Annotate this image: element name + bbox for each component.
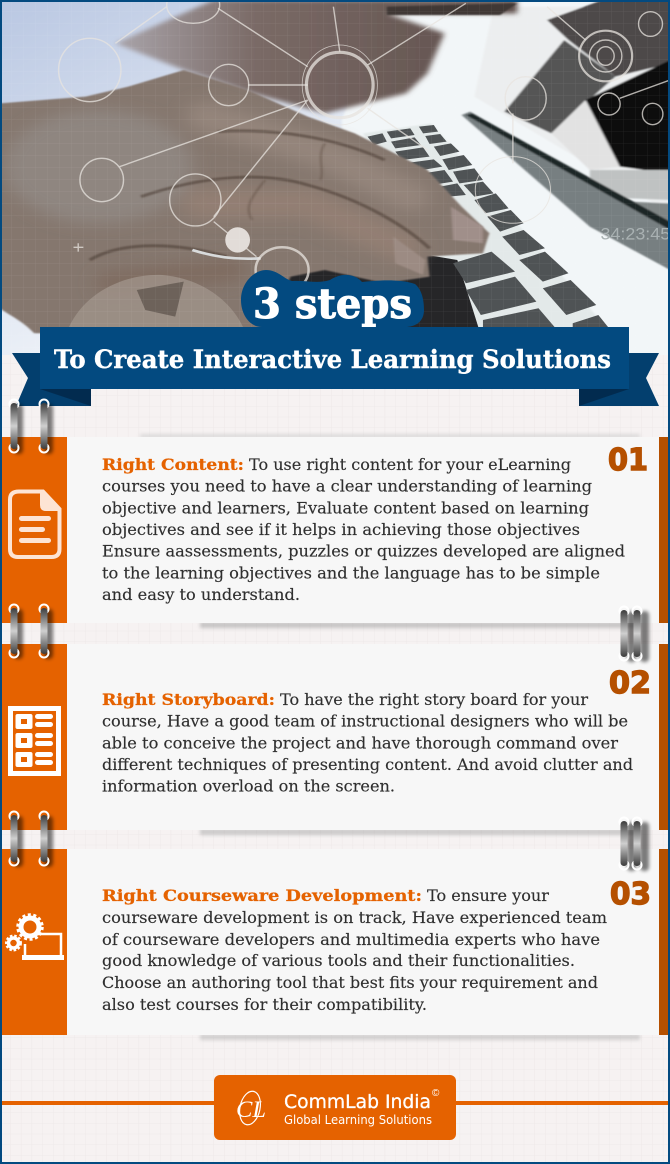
- icon: gears and laptop: [6, 915, 64, 960]
- text block: right storyboard: Right Storyboard:: [102, 690, 275, 709]
- ribbon tail right: [579, 353, 659, 406]
- dark keys below the fingers: [288, 256, 478, 327]
- text block: right content: courses you need to have a clear understanding of learning: [102, 478, 592, 496]
- steps heading: 3 steps: [253, 280, 412, 328]
- text block: right courseware development: courseware development is on track, Have experienced team: [102, 909, 607, 927]
- text block: right content: to the learning objectives and the language has to be simple: [102, 564, 600, 582]
- panel: step 3 right courseware development: [2, 849, 668, 1040]
- copyright mark: ©: [432, 1088, 440, 1099]
- text block: right content: objectives and see if it helps in achieving those objectives: [102, 521, 580, 539]
- ribbon folds: [40, 389, 91, 406]
- text block: right content: objective and learners, Evaluate content based on learning: [102, 499, 589, 517]
- text block: right content: Right Content:: [102, 455, 244, 474]
- text block: right courseware development: [102, 886, 607, 1014]
- logo mark: [236, 1089, 266, 1127]
- text block: right courseware development: good knowledge of various tools and their functionalities.: [102, 952, 575, 970]
- finger creases: [90, 131, 430, 260]
- text block: right courseware development: To ensure your: [427, 887, 550, 905]
- ribbon tail left: [12, 353, 91, 406]
- text block: right storyboard: [102, 690, 633, 796]
- text block: right courseware development: Choose an authoring tool that best fits your requirement and: [102, 974, 598, 992]
- tagline: Global Learning Solutions: [284, 1113, 432, 1127]
- text block: right storyboard: To have the right story board for your: [280, 691, 589, 709]
- hero photo: hands on laptop with network overlay: [0, 0, 670, 357]
- hand highlights: [4, 110, 410, 283]
- text block: right courseware development: of courseware developers and multimedia experts who have: [102, 931, 600, 949]
- text block: right storyboard: course, Have a good team of instructional designers who will be: [102, 713, 628, 731]
- text block: right courseware development: also test courses for their compatibility.: [102, 996, 427, 1014]
- icon: document: [10, 491, 60, 557]
- steps bubble: [241, 270, 424, 327]
- main ribbon band: [40, 327, 629, 389]
- text block: right storyboard: able to conceive the project and have thorough command over: [102, 734, 619, 752]
- title ribbon: [12, 270, 659, 406]
- company name: CommLab India: [284, 1091, 431, 1113]
- number 01: 01: [608, 443, 648, 478]
- text block: right content: Ensure aassessments, puzzles or quizzes developed are aligned: [102, 543, 625, 561]
- text block: right storyboard: different techniques of presenting content. And avoid clutter and: [102, 756, 633, 774]
- number 03: 03: [610, 877, 651, 912]
- logo mark: CL: [236, 1097, 266, 1122]
- number 02: 02: [609, 666, 651, 701]
- icon: storyboard: [8, 706, 61, 776]
- text block: right content: and easy to understand.: [102, 586, 300, 604]
- binder rings: [10, 400, 649, 871]
- title text: To Create Interactive Learning Solutions: [54, 345, 611, 374]
- text block: right content: To use right content for your eLearning: [249, 456, 571, 474]
- text block: right storyboard: information overload on the screen.: [102, 778, 395, 796]
- main hand base: [0, 70, 489, 333]
- footer logo bar: [2, 1075, 668, 1140]
- panel: step 1 right content: [2, 434, 668, 628]
- text block: right courseware development: Right Courseware Development:: [102, 886, 422, 905]
- text block: right content: [102, 455, 625, 604]
- globe: [68, 275, 244, 328]
- panel: step 2 right storyboard: [2, 644, 668, 835]
